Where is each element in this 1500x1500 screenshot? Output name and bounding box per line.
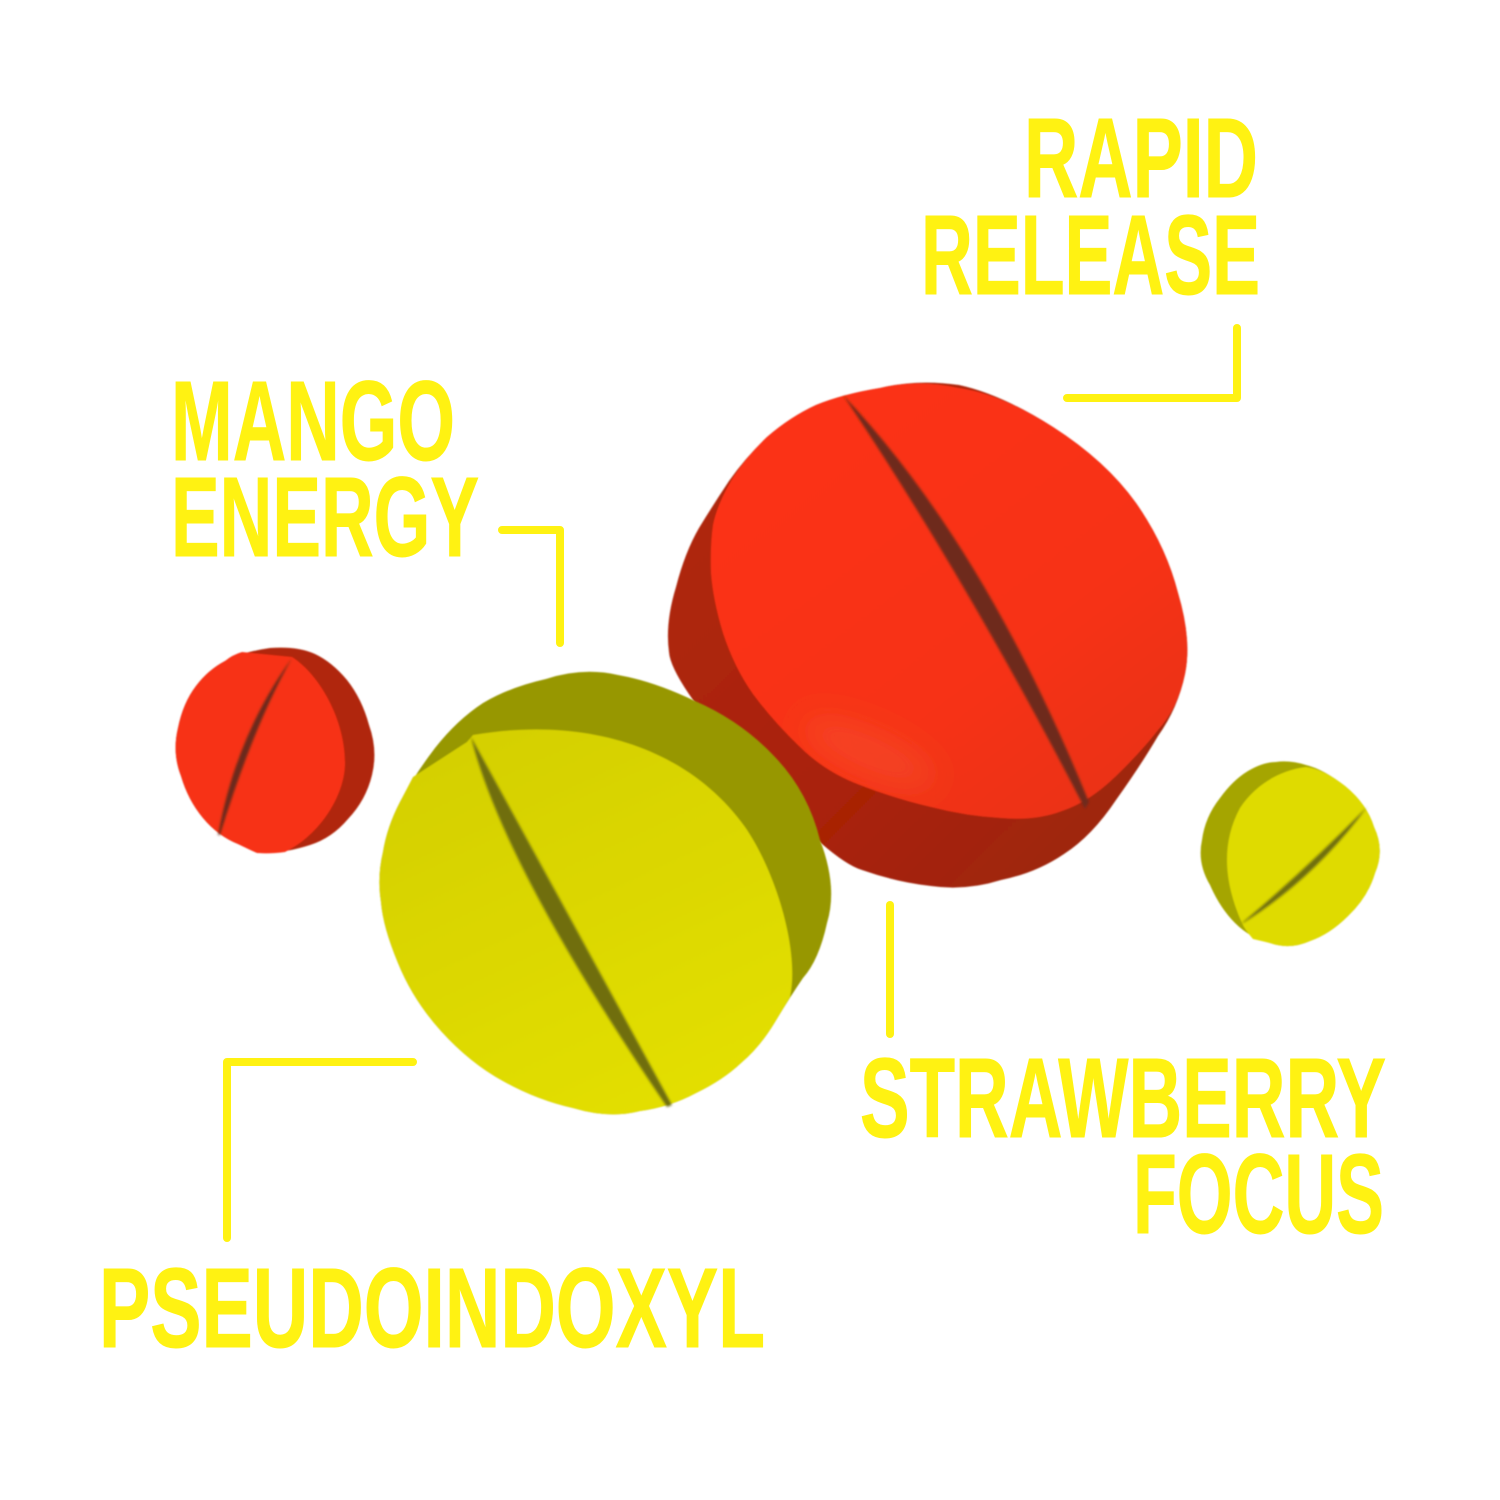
small red pill face	[176, 652, 345, 853]
large red pill side	[668, 383, 1187, 888]
large red pill highlight	[790, 700, 946, 804]
connector: rapid release	[1067, 328, 1237, 398]
connector: mango energy	[502, 530, 560, 643]
large yellow pill side	[379, 672, 831, 1114]
small yellow pill face	[1227, 767, 1380, 946]
small yellow pill side	[1201, 761, 1380, 946]
label: mango energy	[171, 358, 479, 580]
pill: small yellow	[1201, 761, 1380, 946]
connector: pseudoindoxyl	[227, 1062, 413, 1238]
small red pill side	[176, 648, 374, 852]
label: pseudoindoxyl: PSEUDOINDOXYL	[99, 1245, 765, 1371]
pill: large yellow	[379, 672, 831, 1114]
small red pill score line	[218, 658, 292, 835]
label: rapid release: RAPID	[1024, 95, 1258, 221]
large red pill score line	[843, 395, 1089, 809]
infographic canvas	[104, 118, 1386, 1348]
pill: large red	[668, 383, 1187, 888]
label: mango energy: MANGO	[171, 358, 455, 484]
large yellow pill score line	[471, 737, 672, 1107]
label: rapid release	[921, 95, 1260, 318]
large red pill face	[711, 384, 1187, 819]
small yellow pill score line	[1242, 807, 1367, 923]
connector: strawberry focus	[886, 905, 894, 1034]
label: mango energy: ENERGY	[171, 454, 479, 580]
label: rapid release: RELEASE	[921, 192, 1260, 318]
label: strawberry focus	[860, 1035, 1386, 1257]
large yellow pill face	[379, 729, 792, 1114]
pill: small red	[176, 648, 374, 853]
